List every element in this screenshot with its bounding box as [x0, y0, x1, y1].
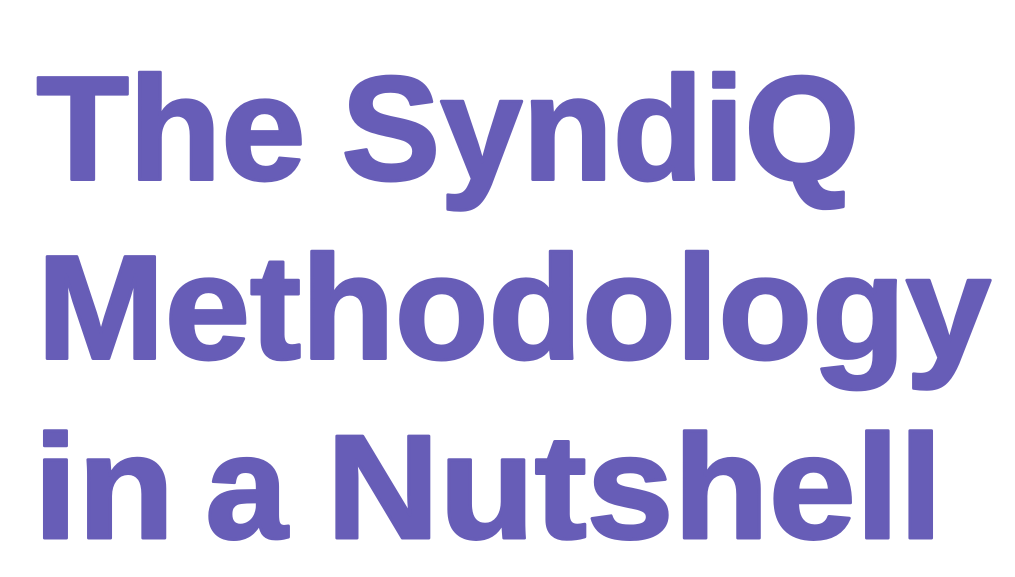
title line 3: a: [206, 405, 289, 570]
title line 3: in: [34, 405, 174, 570]
title line 1: SyndiQ: [342, 46, 860, 212]
title line 1: [36, 46, 860, 212]
title line 3: Nutshell: [326, 405, 942, 570]
title line 3: [34, 405, 942, 570]
title line 2: Methodology: [37, 226, 991, 390]
title line 1: The: [36, 46, 306, 212]
